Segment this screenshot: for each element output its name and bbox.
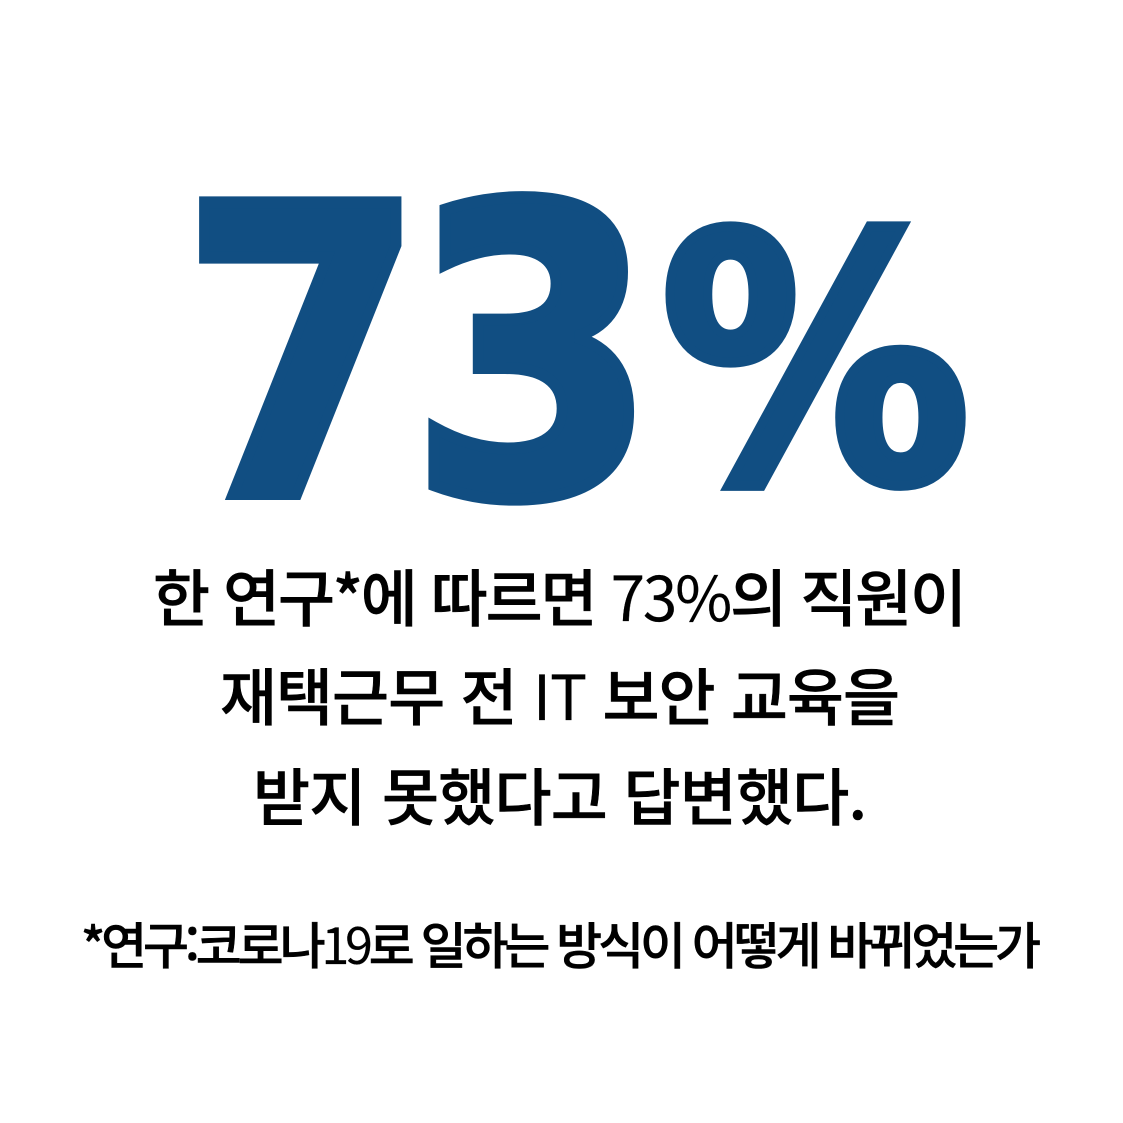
big statistic: 73%: 3 [410,124,657,589]
big statistic: 73%: 7 [181,124,424,589]
main statement text: 한 연구*에 따르면 73%의 직원이 [153,549,967,639]
main statement text: 재택근무 전 IT 보안 교육을 [220,648,900,738]
big statistic: 73% [181,124,971,589]
main statement text: 받지 못했다고 답변했다. [253,748,867,838]
footnote: study title: *연구:코로나19로 일하는 방식이 어떻게 바뀌었는가 [81,907,1041,979]
main statement text [153,549,967,838]
big statistic: 73%: % [660,163,971,562]
